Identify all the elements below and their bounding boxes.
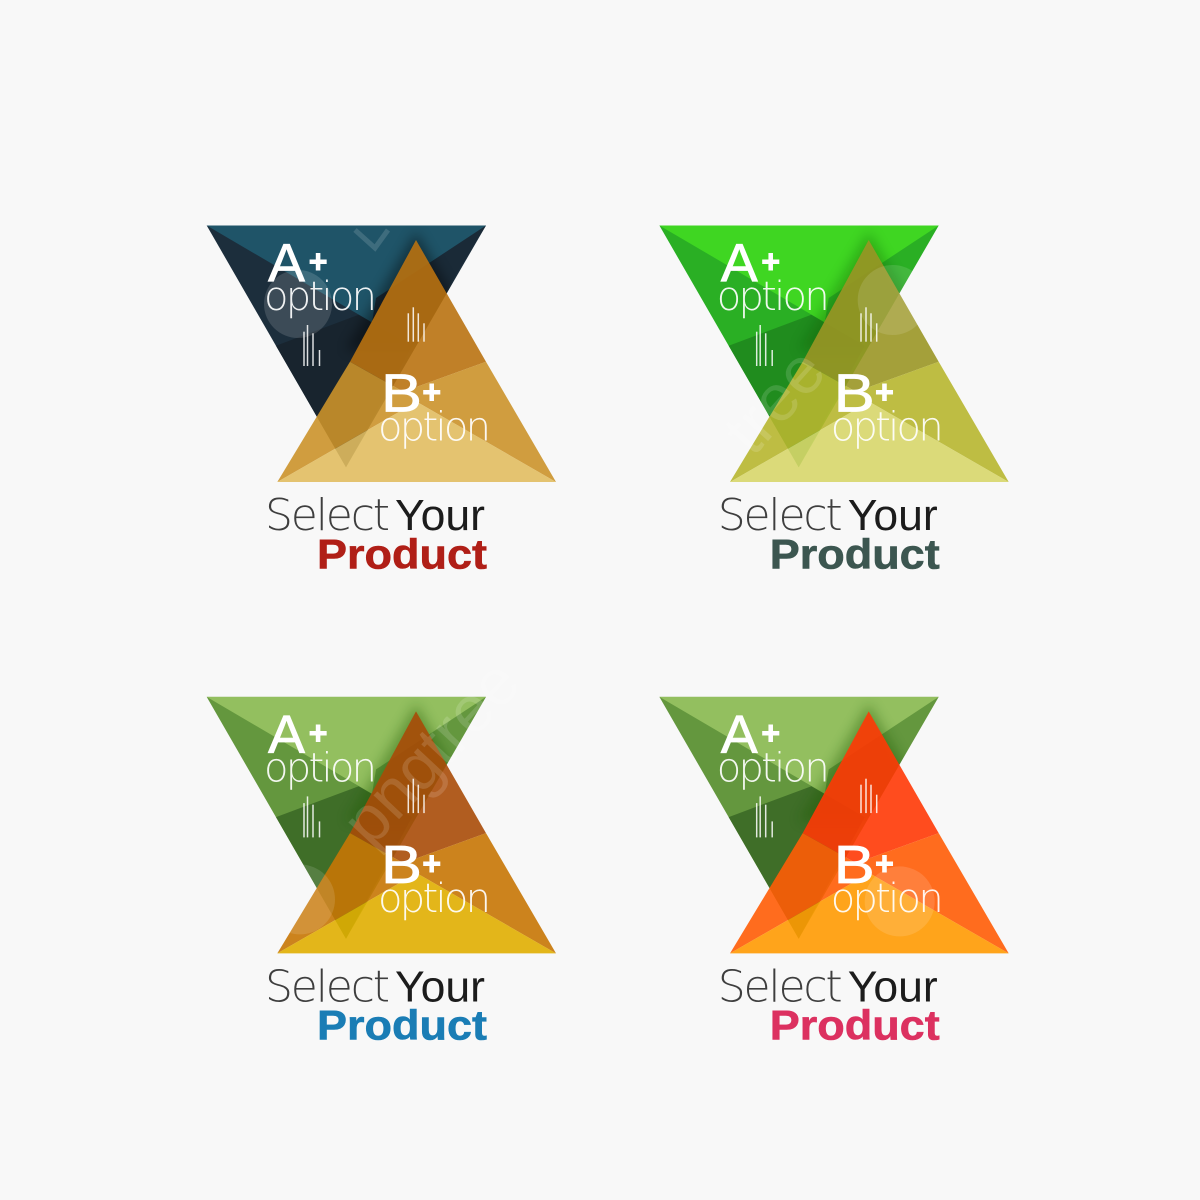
- caption: Select Your: Select: [265, 961, 390, 1012]
- label: B+: [834, 364, 894, 424]
- label: B+: B: [834, 364, 875, 424]
- label: B option: option: [378, 876, 491, 922]
- icon: bars B: [408, 307, 424, 342]
- label: A+: A: [268, 234, 305, 294]
- label: B+: B: [381, 835, 422, 895]
- panel: infographic bottom right: [659, 697, 1009, 1049]
- label: A option: option: [264, 745, 377, 791]
- caption: Select Your: Your: [395, 962, 485, 1011]
- label: A+: +: [761, 244, 780, 280]
- icon: bars B: [861, 307, 877, 342]
- caption: Select Your: Select: [718, 490, 843, 541]
- label: B option: option: [378, 405, 491, 451]
- triangle A: bright green: [659, 226, 939, 467]
- triangle A: leaf green: [207, 697, 486, 939]
- caption: Select Your: [718, 961, 938, 1012]
- caption: Product: Product: [770, 530, 940, 577]
- label: B+: +: [875, 845, 894, 881]
- triangle A: leaf green: [659, 697, 939, 939]
- panel: infographic top right: [659, 226, 1009, 577]
- caption: Select Your: Select: [265, 490, 390, 541]
- label: B+: [834, 835, 894, 895]
- icon: bars A: [304, 796, 320, 837]
- label: A option: option: [264, 274, 377, 320]
- caption: Select Your: [265, 961, 485, 1012]
- label: A option: option: [717, 745, 830, 791]
- watermark mark: [355, 230, 388, 248]
- watermark circle: [865, 866, 935, 936]
- label: B option: option: [831, 405, 944, 451]
- label: B+: +: [875, 374, 894, 410]
- label: A+: +: [761, 715, 780, 751]
- label: A+: [268, 705, 327, 765]
- watermark circle: [858, 265, 928, 335]
- icon: bars A: [757, 325, 772, 366]
- icon: bars B: [861, 779, 877, 813]
- label: B+: +: [422, 845, 441, 881]
- label: B+: +: [422, 374, 441, 410]
- triangle B: ochre: [277, 711, 556, 953]
- label: B+: B: [834, 835, 875, 895]
- icon: bars A: [757, 796, 772, 837]
- label: A+: [721, 234, 780, 294]
- triangle B: red orange: [730, 711, 1009, 953]
- label: A+: +: [309, 244, 327, 280]
- caption: Product: Product: [317, 530, 487, 577]
- triangle B: amber: [277, 240, 556, 482]
- label: A+: A: [268, 705, 305, 765]
- caption: Select Your: Select: [718, 961, 843, 1012]
- label: A+: A: [721, 234, 758, 294]
- watermark circle: [264, 270, 332, 338]
- label: B+: [381, 835, 441, 895]
- caption: Select Your: [718, 490, 938, 541]
- label: B option: option: [831, 876, 944, 922]
- triangle A: navy: [207, 226, 486, 467]
- label: B+: [381, 364, 441, 424]
- caption: Product: Product: [317, 1002, 487, 1049]
- watermark circle: [265, 864, 335, 934]
- caption: Select Your: Your: [395, 491, 485, 540]
- caption: Select Your: Your: [848, 491, 938, 540]
- caption: Select Your: [265, 490, 485, 541]
- panel: infographic top left: [207, 226, 556, 577]
- caption: Select Your: Your: [848, 962, 938, 1011]
- label: A option: option: [717, 274, 830, 320]
- triangle B: olive: [730, 240, 1009, 482]
- label: A+: [721, 705, 780, 765]
- label: A+: +: [309, 715, 327, 751]
- label: A+: [268, 234, 327, 294]
- watermark text: tree: [708, 333, 839, 467]
- label: A+: A: [721, 705, 758, 765]
- watermark text: pngtree: [327, 645, 534, 859]
- caption: Product: Product: [770, 1002, 940, 1049]
- icon: bars B: [408, 779, 424, 813]
- icon: bars A: [304, 325, 320, 366]
- panel: infographic bottom left: [206, 696, 556, 1040]
- label: B+: B: [381, 364, 422, 424]
